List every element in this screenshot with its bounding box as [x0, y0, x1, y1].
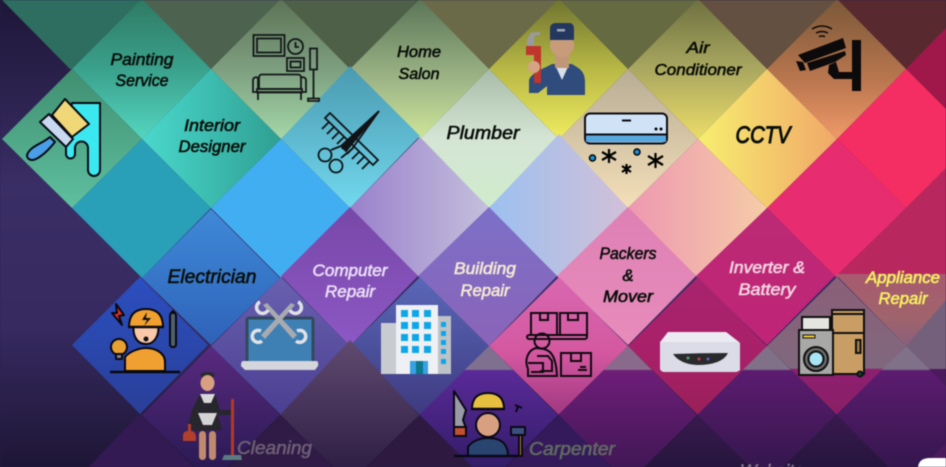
label: carpenter: Carpenter: [529, 439, 616, 459]
icon: comb and scissors: [318, 111, 379, 172]
label: interior designer second line: Designer: [178, 137, 247, 156]
label: interior designer: Interior: [184, 116, 241, 135]
icon: air conditioner: [585, 114, 667, 174]
icon: washing machine and fridge: [799, 310, 864, 376]
label: painting service: Painting: [110, 50, 174, 69]
label: painting service second line: Service: [116, 71, 168, 90]
icon: electrician: [110, 304, 180, 372]
label: appliance repair: Appliance: [865, 269, 940, 287]
label: computer repair: Computer: [312, 262, 389, 280]
label: battery: Battery: [738, 281, 797, 299]
icon: laptop repair: [241, 302, 318, 370]
label: computer repair second line: Repair: [325, 283, 377, 301]
icon: plumber: [526, 23, 585, 95]
label: mover: Mover: [603, 288, 655, 306]
icon: CCTV camera: [796, 26, 861, 91]
icon: carpenter: [454, 391, 525, 456]
icon: office building: [381, 305, 451, 374]
label: air conditioner: Air: [685, 40, 710, 57]
label: building repair second line: Repair: [460, 282, 511, 300]
label: CCTV: CCTV: [736, 122, 792, 149]
label: ampersand: &: [622, 267, 634, 285]
label: air conditioner second line: Conditioner: [654, 62, 742, 79]
icon: living room furniture: [253, 35, 319, 101]
icon: inverter box: [660, 332, 740, 372]
label: cleaning: Cleaning: [237, 438, 312, 458]
label: plumber: Plumber: [446, 123, 521, 143]
label: inverter and battery: Inverter &: [729, 259, 805, 277]
label: electrician: Electrician: [168, 267, 256, 288]
label: packers and mover: Packers: [600, 245, 656, 263]
white corner shape: [918, 458, 946, 467]
label: home salon second line: Salon: [398, 66, 440, 83]
icon: paint brush: [27, 99, 100, 176]
label: building repair: Building: [454, 260, 517, 278]
icon: packers boxes: [526, 313, 591, 376]
label: home salon: Home: [397, 44, 441, 61]
label: appliance repair second line: Repair: [878, 290, 929, 308]
icon: maid figure: [183, 372, 242, 460]
